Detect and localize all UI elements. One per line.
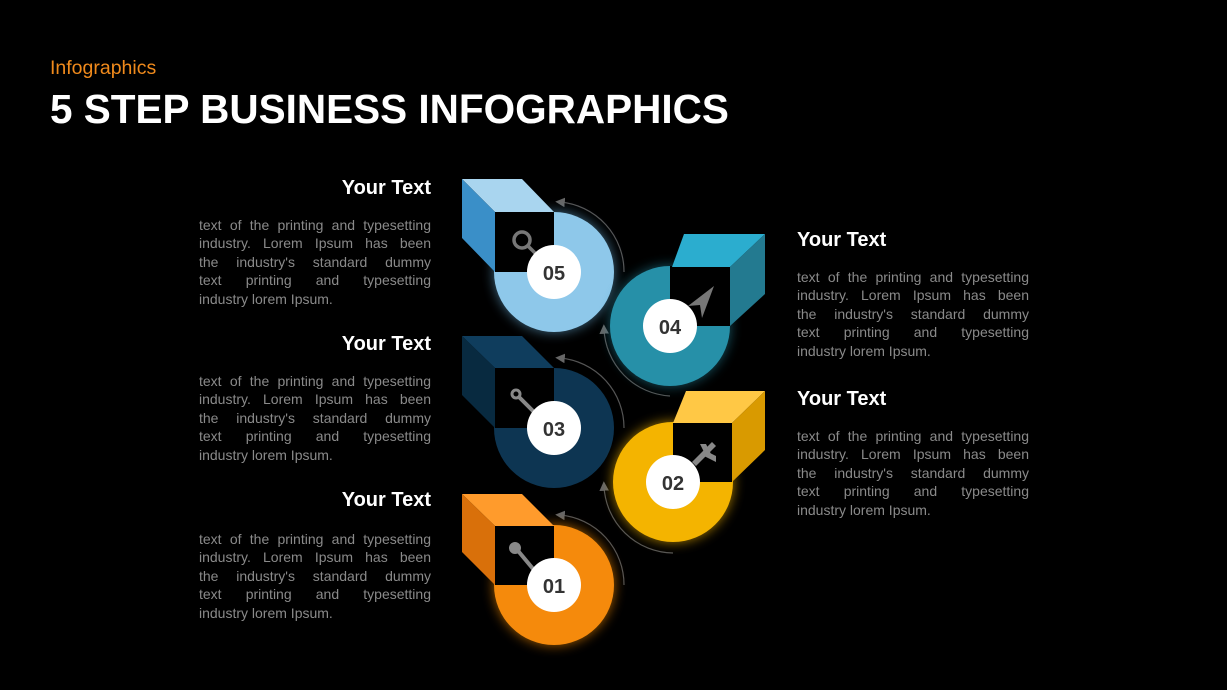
text block 01: Your Text: [342, 489, 431, 511]
text block 02: [797, 388, 1029, 518]
text block 05: [199, 177, 431, 307]
subtitle: Infographics: [50, 57, 156, 79]
title: 5 STEP BUSINESS INFOGRAPHICS: [50, 86, 729, 132]
text block 02: Your Text: [797, 388, 886, 410]
icon: wrench: [512, 390, 534, 412]
icon: pin: [511, 544, 534, 570]
text block 02: industry. Lorem Ipsum has been: [797, 446, 1029, 462]
text block 03: [199, 333, 431, 463]
step 04: 04: [659, 317, 682, 339]
text block 05: industry lorem Ipsum.: [199, 291, 333, 307]
text block 01: text printing and typesetting: [199, 586, 431, 602]
text block 04: industry lorem Ipsum.: [797, 343, 931, 359]
text block 01: text of the printing and typesetting: [199, 531, 431, 547]
text block 04: the industry's standard dummy: [797, 306, 1029, 322]
text block 02: text of the printing and typesetting: [797, 428, 1029, 444]
text block 04: text of the printing and typesetting: [797, 269, 1029, 285]
step 01: [462, 494, 614, 645]
text block 05: the industry's standard dummy: [199, 254, 431, 270]
step 02: 02: [662, 473, 684, 495]
step 01: 01: [543, 576, 565, 598]
text block 02: the industry's standard dummy: [797, 465, 1029, 481]
arrows: [560, 202, 673, 585]
step 05: [462, 179, 614, 332]
step 02: [613, 391, 765, 542]
text block 04: [797, 229, 1029, 359]
text block 04: Your Text: [797, 229, 886, 251]
text block 05: industry. Lorem Ipsum has been: [199, 235, 431, 251]
icon: plane: [692, 442, 716, 466]
icon: navigation arrow: [688, 286, 714, 318]
text block 03: text printing and typesetting: [199, 428, 431, 444]
step 03: [462, 336, 614, 488]
text block 05: text printing and typesetting: [199, 272, 431, 288]
step 05: 05: [543, 263, 565, 285]
text block 01: industry lorem Ipsum.: [199, 605, 333, 621]
text block 01: industry. Lorem Ipsum has been: [199, 549, 431, 565]
text block 05: Your Text: [342, 177, 431, 199]
step 03: 03: [543, 419, 565, 441]
text block 03: industry lorem Ipsum.: [199, 447, 333, 463]
text block 02: text printing and typesetting: [797, 483, 1029, 499]
text block 04: industry. Lorem Ipsum has been: [797, 287, 1029, 303]
text block 03: the industry's standard dummy: [199, 410, 431, 426]
icon: magnifier: [514, 232, 536, 254]
text block 01: the industry's standard dummy: [199, 568, 431, 584]
text block 03: Your Text: [342, 333, 431, 355]
text block 03: text of the printing and typesetting: [199, 373, 431, 389]
text block 01: [199, 489, 431, 621]
step 04: [610, 234, 765, 386]
text block 02: industry lorem Ipsum.: [797, 502, 931, 518]
text block 05: text of the printing and typesetting: [199, 217, 431, 233]
text block 03: industry. Lorem Ipsum has been: [199, 391, 431, 407]
text block 04: text printing and typesetting: [797, 324, 1029, 340]
